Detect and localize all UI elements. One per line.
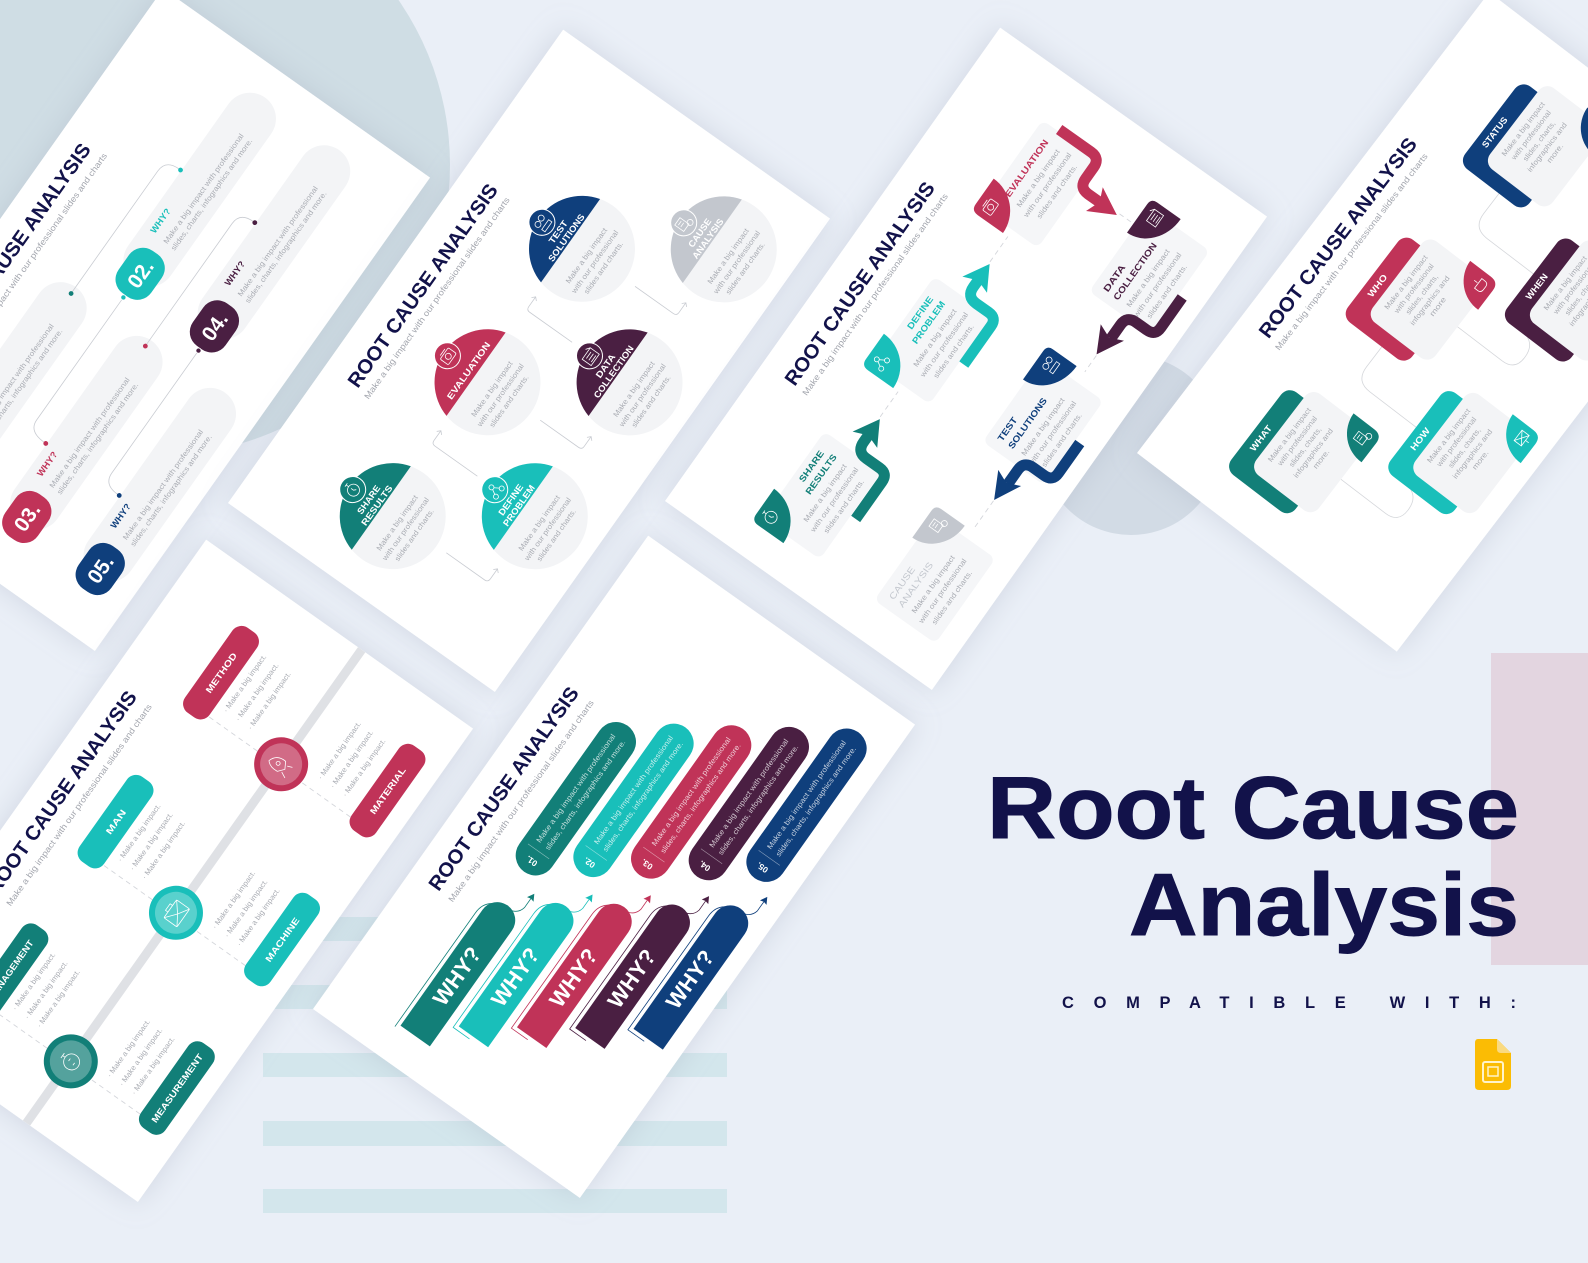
answer pill 5: Make a big impact with professional — [765, 738, 848, 851]
bubble row 3: slides, charts, infographics and more. — [55, 381, 140, 496]
panel: circle steps slide — [228, 30, 830, 692]
why bar 4 — [570, 875, 712, 1053]
answer pill 3 — [623, 717, 759, 887]
step: test solutions: with our professional — [569, 228, 620, 296]
card: what — [1225, 371, 1382, 532]
pill: method — [179, 622, 263, 724]
why bar 1 — [395, 872, 538, 1050]
node: briefcase — [138, 875, 214, 950]
card: data collection: slides and charts. — [1145, 263, 1189, 320]
card: how — [1384, 372, 1541, 533]
answer pill 2: slides, charts, infographics and more. — [601, 740, 685, 853]
answer pill 1 — [508, 714, 644, 883]
fishbone spine — [23, 647, 365, 1126]
pill: material: MATERIAL — [368, 765, 408, 816]
why bar 2 — [453, 873, 596, 1051]
step: define problem: PROBLEM — [501, 483, 537, 528]
arrow: share results — [812, 410, 911, 519]
card: evaluation: EVALUATION — [1003, 138, 1050, 199]
title: Root Cause — [987, 758, 1519, 857]
answer pill 4: slides, charts, infographics and more. — [716, 743, 800, 857]
why bar 5: WHY? — [661, 945, 719, 1014]
card: cause analysis: CAUSE — [887, 565, 917, 602]
card: share results: Make a big impact — [801, 462, 849, 524]
card: what: infographics and — [1291, 426, 1335, 480]
step: share results: SHARE — [355, 483, 382, 516]
background stripes — [263, 917, 727, 1213]
bullets: method: · Make a big impact. — [221, 653, 268, 714]
compatible with label: COMPATIBLE WITH: — [1062, 994, 1516, 1012]
card: evaluation — [971, 117, 1100, 254]
card: what: Make a big impact — [1266, 406, 1313, 464]
answer pill 2: 02. — [582, 855, 597, 870]
background pink rectangle — [1491, 653, 1588, 965]
bubble row 4: Make a big impact with professional — [236, 184, 320, 298]
heading: ROOT CAUSE ANALYSIS — [344, 180, 503, 392]
answer pill 4: 04. — [697, 859, 712, 874]
bullets: measurement: · Make a big impact. — [105, 1018, 152, 1079]
answer pill 5: slides, charts, infographics and more. — [774, 745, 858, 858]
bubble row 2: Make a big impact with professional — [161, 132, 246, 246]
step: test solutions — [502, 170, 656, 323]
bullets: machine: · Make a big impact. — [210, 869, 257, 930]
bubble row 2 — [104, 82, 286, 310]
card: when: Make a big impact — [1542, 254, 1588, 312]
panel: why bars slide — [313, 536, 915, 1198]
answer pill 4 — [681, 719, 817, 888]
card: cause analysis: slides and charts. — [930, 569, 974, 626]
dashed links — [858, 169, 1171, 529]
connector lines — [1303, 194, 1588, 523]
bubble row 3: WHY? — [35, 450, 59, 478]
bubble row 4: slides, charts, infographics and more. — [243, 189, 329, 305]
node: rocket — [244, 727, 319, 802]
card: define problem: Make a big impact — [911, 307, 958, 369]
step: share results: with our professional — [380, 495, 431, 563]
step: test solutions: TEST — [547, 218, 570, 246]
card: what: more. — [1311, 448, 1331, 471]
card: define problem: PROBLEM — [910, 299, 947, 346]
card: when — [1500, 220, 1588, 381]
subheading: Make a big impact with our professional slides and charts — [446, 698, 596, 904]
step: evaluation: with our professional — [474, 362, 526, 429]
bubble row 4 — [178, 135, 360, 363]
step: data collection — [549, 304, 703, 456]
card: data collection: Make a big impact — [1124, 247, 1172, 309]
answer pill 2 — [565, 716, 702, 885]
card: data collection — [1087, 198, 1215, 335]
bubble row 5: slides, charts, infographics and more. — [128, 433, 214, 548]
step: data collection: slides and charts. — [629, 373, 673, 429]
arrow: evaluation — [1030, 129, 1138, 227]
card: cause analysis — [870, 505, 1001, 643]
card: how: more. — [1470, 449, 1491, 471]
card: evaluation: slides and charts. — [1035, 163, 1079, 220]
card: cause analysis: Make a big impact — [910, 554, 957, 615]
card: test solutions: SOLUTIONS — [1006, 396, 1049, 451]
card: what: with professional — [1275, 414, 1319, 468]
card: status: more. — [1545, 142, 1565, 165]
step: cause analysis: with our professional — [711, 229, 762, 296]
bullets: method: · Make a big impact. — [233, 661, 281, 723]
answer pill 1: Make a big impact with professional — [534, 732, 618, 844]
pill: man — [73, 771, 158, 873]
card: test solutions — [980, 345, 1111, 485]
step: cause analysis: CAUSE — [686, 217, 713, 249]
bubble row 2: slides, charts, infographics and more. — [169, 137, 254, 252]
answer pill 5 — [738, 721, 875, 890]
bubble row 2: WHY? — [148, 206, 173, 235]
panel: arrow flow slide — [665, 28, 1267, 690]
card: who: Make a big impact — [1382, 253, 1430, 311]
card: test solutions: slides and charts. — [1040, 411, 1084, 469]
card: how: with professional — [1434, 415, 1479, 469]
card: share results — [752, 427, 882, 566]
pill: management — [0, 919, 53, 1021]
card: evaluation: Make a big impact — [1014, 148, 1062, 209]
step: share results: RESULTS — [359, 483, 395, 528]
bullets: method: · Make a big impact. — [246, 670, 293, 731]
card: how: infographics and — [1451, 427, 1494, 480]
bubble row 5: 05. — [83, 551, 119, 588]
answer pill 4: Make a big impact with professional — [707, 737, 791, 849]
card: data collection: COLLECTION — [1111, 241, 1159, 302]
icon: google slides — [1475, 1039, 1511, 1090]
arrow: test solutions — [983, 414, 1080, 521]
answer pill 2: Make a big impact with professional — [592, 734, 675, 846]
why bar 5 — [628, 876, 771, 1053]
bubble row 3: Make a big impact with professional — [47, 376, 132, 490]
step: share results: slides and charts. — [393, 507, 436, 563]
card: evaluation: with our professional — [1021, 151, 1074, 220]
step: define problem: DEFINE — [496, 482, 525, 517]
answer pill 3: slides, charts, infographics and more. — [658, 741, 743, 855]
bullets: machine: · Make a big impact. — [235, 886, 282, 948]
bullets: management: · Make a big impact. — [35, 968, 82, 1029]
card: status: slides, charts, — [1521, 119, 1557, 163]
bullets: material: · Make a big impact. — [328, 728, 375, 790]
bullets: material — [316, 720, 387, 798]
card: status: infographics and — [1525, 121, 1569, 174]
card: who — [1341, 219, 1499, 380]
step: share results — [312, 438, 467, 590]
arrow: define problem — [921, 255, 1020, 365]
card: test solutions: TEST — [996, 415, 1020, 443]
pill: man: MAN — [104, 808, 128, 836]
card: status — [1459, 66, 1588, 226]
card: what: WHAT — [1248, 423, 1274, 453]
bullets: man: · Make a big impact. — [115, 802, 163, 863]
why bar 4: WHY? — [602, 944, 661, 1013]
card: status: Make a big impact — [1500, 100, 1547, 158]
card: who: with professional — [1391, 261, 1436, 316]
card: share results: slides and charts. — [822, 478, 866, 535]
card: define problem: DEFINE — [905, 294, 935, 331]
step: evaluation: slides and charts. — [487, 373, 531, 429]
card: how: Make a big impact — [1425, 407, 1472, 465]
panel: 5W bracket slide — [1137, 0, 1588, 652]
bullets: man: · Make a big impact. — [128, 811, 175, 872]
answer pill 3: Make a big impact with professional — [650, 735, 733, 848]
bullets: method — [221, 653, 293, 731]
bullets: management: · Make a big impact. — [10, 950, 57, 1012]
step: evaluation: Make a big impact — [469, 359, 515, 419]
answer pill 3: 03. — [639, 857, 655, 872]
arrow: data collection — [1085, 268, 1182, 376]
step: data collection: DATA — [594, 352, 618, 380]
card: share results: RESULTS — [803, 452, 839, 496]
card: what: slides, charts, — [1287, 425, 1323, 469]
card: who: more — [1428, 295, 1448, 318]
subheading: Make a big impact with our professional slides and charts — [362, 195, 512, 401]
bullets: management — [10, 950, 82, 1029]
bullets: machine: · Make a big impact. — [222, 878, 269, 939]
bubble row 3 — [0, 326, 173, 553]
step: cause analysis: ANALYSIS — [690, 217, 726, 261]
step: evaluation: EVALUATION — [445, 340, 492, 401]
heading: ROOT CAUSE ANALYSIS — [1255, 134, 1422, 343]
panel: five whys slide — [0, 0, 430, 651]
bullets: measurement: · Make a big impact. — [117, 1026, 164, 1088]
card: who: slides, charts, — [1404, 273, 1440, 316]
card: test solutions: Make a big impact — [1019, 396, 1067, 457]
step: evaluation — [407, 304, 561, 456]
step: data collection: Make a big impact — [611, 360, 657, 419]
heading: ROOT CAUSE ANALYSIS — [425, 683, 584, 895]
card: define problem: with our professional — [918, 310, 970, 380]
step: test solutions: slides and charts. — [582, 240, 625, 296]
card: test solutions: with our professional — [1026, 399, 1078, 468]
dashed bones — [0, 717, 350, 1114]
bubble row 4: WHY? — [223, 259, 247, 288]
bullets: material: · Make a big impact. — [316, 720, 363, 781]
card: define problem: slides and charts. — [931, 323, 976, 380]
card: when: WHEN — [1524, 272, 1550, 302]
step: define problem: slides and charts. — [535, 507, 578, 563]
card: who: WHO — [1366, 272, 1389, 299]
step: cause analysis: Make a big impact — [705, 227, 751, 286]
card: who: infographics and — [1408, 274, 1452, 327]
step: cause analysis: slides and charts. — [724, 240, 767, 296]
step: test solutions: SOLUTIONS — [546, 212, 587, 264]
why bar 3: WHY? — [544, 944, 603, 1012]
bullets: machine — [210, 869, 282, 948]
bubble row 5 — [64, 378, 246, 605]
pill: machine: MACHINE — [263, 916, 302, 964]
card: data collection: DATA — [1101, 262, 1128, 294]
step arrows — [383, 228, 688, 584]
why bar 2: WHY? — [486, 943, 544, 1011]
background circle: top left — [0, 0, 450, 455]
answer pill 1: 01. — [524, 854, 539, 869]
connector lines and dots — [0, 156, 297, 499]
answer pill 1: slides, charts, infographics and more. — [543, 738, 627, 852]
subheading: Make a big impact with our professional slides and charts — [800, 192, 950, 397]
bullets: man: · Make a big impact. — [140, 819, 187, 881]
node: stopwatch — [33, 1024, 108, 1099]
panel: fishbone slide — [0, 540, 473, 1202]
bullets: management: · Make a big impact. — [22, 959, 70, 1021]
step: data collection: COLLECTION — [592, 344, 636, 400]
why bar 3 — [511, 874, 654, 1052]
card: cause analysis: with our professional — [916, 557, 969, 626]
title: Analysis — [1129, 855, 1519, 954]
background circle: middle — [1041, 355, 1221, 535]
bubble row 2: 02. — [123, 256, 159, 293]
card: how: HOW — [1408, 425, 1432, 452]
answer pill 5: 05. — [755, 860, 770, 875]
bullets: material: · Make a big impact. — [340, 737, 387, 798]
why bar 1: WHY? — [428, 942, 486, 1010]
pill: material — [345, 739, 430, 842]
step: cause analysis — [643, 171, 798, 323]
card: cause analysis: ANALYSIS — [896, 560, 935, 609]
step: define problem: Make a big impact — [516, 493, 562, 553]
bubble row 4: 04. — [197, 308, 233, 346]
step: share results: Make a big impact — [374, 493, 420, 552]
pill: measurement: MEASUREMENT — [150, 1052, 205, 1125]
title — [987, 758, 1519, 954]
step: define problem: with our professional — [522, 496, 573, 563]
bubble row 5: WHY? — [108, 502, 133, 530]
step: data collection: with our professional — [617, 362, 668, 429]
bullets: measurement: · Make a big impact. — [129, 1035, 177, 1096]
card: define problem — [861, 272, 991, 411]
step: test solutions: Make a big impact — [564, 226, 609, 285]
bubble row 1 — [0, 272, 97, 499]
card: data collection: with our professional — [1131, 250, 1184, 320]
card: status: STATUS — [1480, 115, 1510, 150]
subheading: Make a big impact with our professional slides and charts — [1273, 151, 1430, 352]
bubble row 3: 03. — [10, 499, 45, 536]
card: share results: with our professional — [808, 465, 861, 535]
card: share results: SHARE — [797, 449, 826, 484]
subheading: Make a big impact with our professional slides and charts — [4, 702, 154, 908]
heading: ROOT CAUSE ANALYSIS — [781, 178, 940, 390]
bubble row 5: Make a big impact with professional — [121, 428, 205, 542]
bullets: man — [115, 802, 187, 881]
bullets: measurement — [105, 1018, 177, 1096]
card: status: with professional — [1509, 108, 1553, 162]
card: how: slides, charts, — [1446, 426, 1483, 470]
pill: measurement — [135, 1037, 219, 1139]
pill: method: METHOD — [204, 650, 239, 695]
pill: machine — [240, 888, 324, 991]
step: define problem — [454, 438, 609, 590]
